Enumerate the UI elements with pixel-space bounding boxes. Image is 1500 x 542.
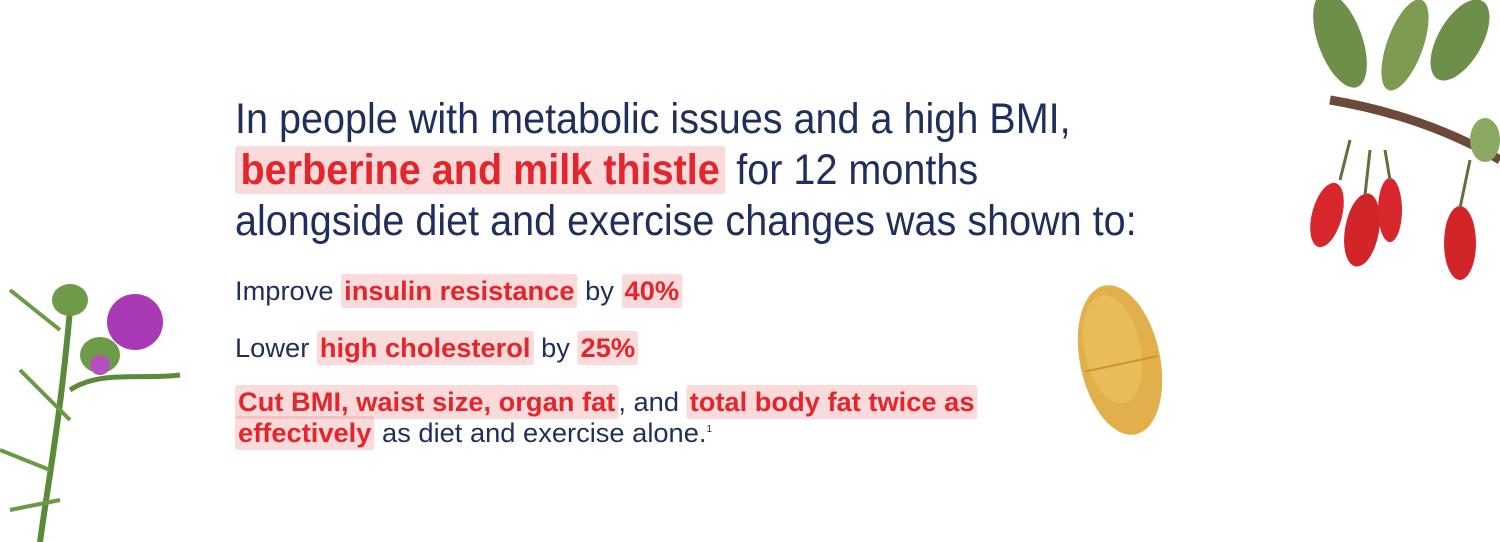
title: In people with metabolic issues and a high BMI, [235, 95, 1071, 143]
title [235, 95, 1137, 245]
benefit: insulin: Improve insulin resistance by 40% [235, 276, 679, 306]
benefit: body fat: Cut BMI, waist size, organ fat, and total body fat twice as [238, 387, 974, 417]
icon: pill [1078, 285, 1162, 435]
title: alongside diet and exercise changes was shown to: [235, 197, 1137, 245]
icon: milk thistle [0, 284, 180, 542]
title: berberine and milk thistle for 12 months [241, 146, 978, 194]
icon: barberries [1310, 0, 1500, 280]
benefit: cholesterol: Lower high cholesterol by 25% [235, 333, 635, 363]
benefit: body fat [235, 385, 978, 450]
benefit: body fat: effectively as diet and exercise alone.1 [238, 418, 712, 448]
